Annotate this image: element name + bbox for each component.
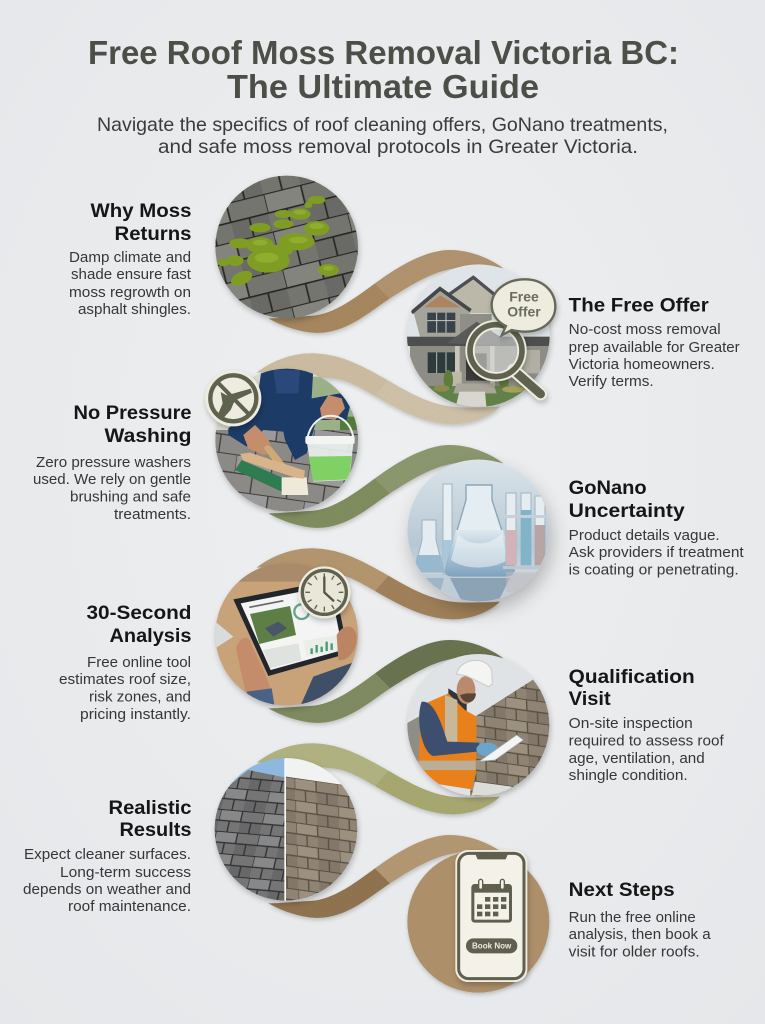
- text block: qualification visit: On-site inspection: [569, 715, 693, 732]
- photo: gentle brushing: [205, 367, 360, 517]
- text block: gonano uncertainty: Uncertainty: [569, 500, 685, 522]
- text block: qualification visit: shingle condition.: [569, 767, 688, 784]
- text block: the free offer: prep available for Greater: [569, 339, 740, 356]
- tablet scene: [213, 562, 360, 708]
- icon: clock: [298, 566, 350, 618]
- text block: 30-second analysis: pricing instantly.: [80, 706, 191, 723]
- text block: gonano uncertainty: Product details vague.: [569, 527, 720, 544]
- callout: free offer bubble: Offer: [507, 304, 541, 320]
- ribbon: brown connector 1: [268, 250, 503, 333]
- title: The Ultimate Guide: [227, 68, 539, 105]
- text block: gonano uncertainty: GoNano: [569, 477, 647, 499]
- text block: qualification visit: required to assess roof: [569, 732, 725, 750]
- ribbon: beige connector 2: [257, 353, 500, 424]
- text block: the free offer: Victoria homeowners.: [569, 356, 715, 373]
- text block: next steps: Run the free online: [569, 909, 696, 926]
- text block: qualification visit: Visit: [569, 688, 611, 710]
- text block: 30-second analysis: Free online tool: [87, 654, 191, 671]
- title: [88, 34, 679, 105]
- text block: 30-second analysis: risk zones, and: [89, 688, 191, 706]
- text block: gonano uncertainty: [569, 477, 745, 578]
- ribbon: olive connector 5: [268, 640, 503, 723]
- photo: tablet analysis: [213, 562, 360, 708]
- text block: the free offer: No-cost moss removal: [569, 321, 721, 338]
- text block: 30-second analysis: estimates roof size,: [59, 671, 191, 688]
- text block: 30-second analysis: [59, 602, 192, 723]
- icon: calendar: [471, 879, 512, 923]
- ribbon: brown connector 7: [268, 835, 503, 918]
- text block: gonano uncertainty: is coating or penetrating.: [569, 562, 739, 578]
- ribbon: green connector 3: [268, 445, 503, 528]
- text block: next steps: visit for older roofs.: [569, 944, 700, 960]
- subtitle: Navigate the specifics of roof cleaning offers, GoNano treatments,: [97, 114, 668, 136]
- subtitle: [97, 114, 668, 158]
- text block: realistic results: roof maintenance.: [68, 898, 191, 915]
- icon: smartphone with calendar: [455, 850, 527, 982]
- icon: no pressure washer: [205, 370, 261, 426]
- text block: why moss returns: Damp climate and: [69, 249, 191, 266]
- text block: no pressure washing: No Pressure: [74, 402, 192, 424]
- button: book now: Book Now: [472, 941, 512, 951]
- callout: free offer bubble: [492, 279, 555, 335]
- text block: qualification visit: Qualification: [569, 666, 695, 688]
- text block: no pressure washing: [33, 402, 192, 523]
- text block: no pressure washing: brushing and safe: [70, 488, 191, 506]
- text block: no pressure washing: used. We rely on gentle: [33, 471, 191, 488]
- text block: why moss returns: shade ensure fast: [71, 266, 192, 283]
- text block: next steps: Next Steps: [569, 879, 675, 901]
- ribbon: khaki connector 6: [257, 743, 500, 814]
- title: Free Roof Moss Removal Victoria BC:: [88, 34, 679, 71]
- text block: no pressure washing: treatments.: [114, 506, 191, 523]
- text block: qualification visit: [569, 666, 725, 784]
- photo: roof inspector: [407, 653, 552, 800]
- text block: 30-second analysis: 30-Second: [86, 602, 192, 624]
- text block: why moss returns: asphalt shingles.: [78, 301, 191, 318]
- text block: the free offer: Verify terms.: [569, 373, 654, 390]
- text block: no pressure washing: Zero pressure washers: [36, 454, 191, 471]
- text block: next steps: [569, 879, 711, 960]
- text block: realistic results: [23, 797, 192, 915]
- subtitle: and safe moss removal protocols in Greater Victoria.: [158, 136, 638, 158]
- text block: qualification visit: age, ventilation, and: [569, 750, 705, 767]
- text block: why moss returns: [69, 200, 192, 318]
- text block: realistic results: Expect cleaner surfaces.: [24, 846, 191, 863]
- text block: realistic results: Results: [120, 819, 192, 841]
- photo: before and after roof: [213, 757, 360, 903]
- text block: why moss returns: Returns: [114, 223, 192, 245]
- photo: house with free offer badge: [407, 263, 555, 410]
- house photo: [407, 263, 550, 410]
- ribbon: brown connector 4: [257, 548, 500, 619]
- text block: realistic results: depends on weather and: [23, 881, 191, 898]
- text block: why moss returns: Why Moss: [90, 200, 192, 222]
- photo: booking phone: [407, 850, 549, 993]
- text block: the free offer: The Free Offer: [569, 294, 709, 316]
- text block: realistic results: Realistic: [108, 797, 192, 819]
- brushing scene: [213, 367, 360, 517]
- text block: the free offer: [569, 294, 740, 390]
- photo: laboratory glassware: [405, 458, 553, 604]
- icon: magnifying glass: [470, 325, 541, 394]
- text block: next steps: analysis, then book a: [569, 926, 711, 943]
- photo: mossy shingles: [213, 173, 360, 320]
- text block: no pressure washing: Washing: [104, 425, 192, 447]
- kraft disc: [407, 851, 549, 993]
- text block: gonano uncertainty: Ask providers if treatment: [569, 544, 745, 561]
- text block: realistic results: Long-term success: [60, 864, 191, 881]
- text block: why moss returns: moss regrowth on: [69, 284, 191, 301]
- callout: free offer bubble: Free: [509, 288, 539, 304]
- text block: 30-second analysis: Analysis: [110, 625, 192, 647]
